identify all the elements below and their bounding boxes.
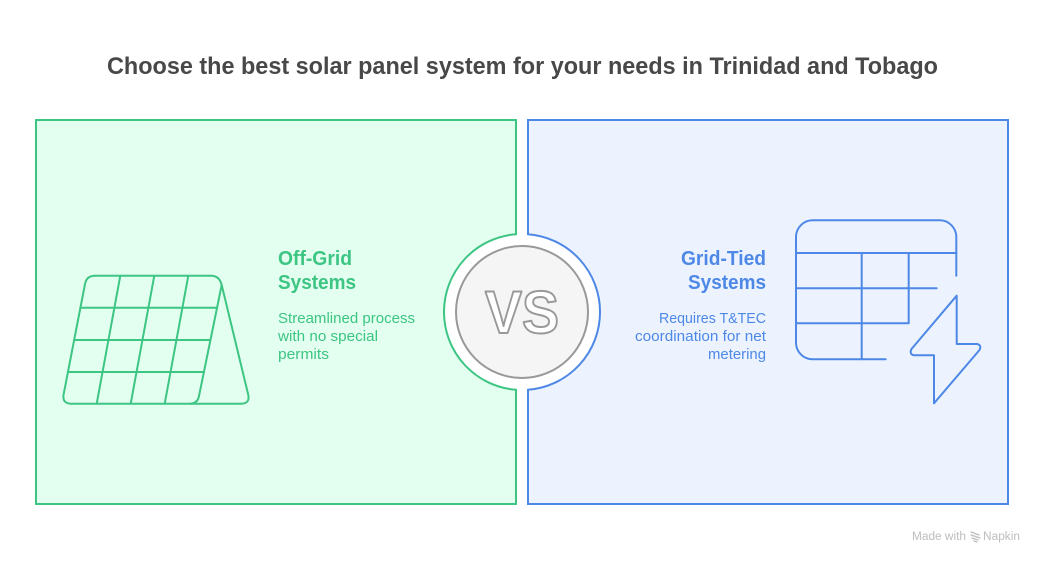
heading: grid-tied systems: Systems: [688, 272, 766, 294]
text: grid-tied description: Requires T&TEC: [659, 310, 766, 327]
heading: grid-tied systems: [681, 248, 766, 294]
text: off-grid description: with no special: [277, 328, 378, 345]
icon: grid with lightning bolt: [796, 220, 980, 403]
heading: off-grid systems: Systems: [278, 272, 356, 294]
title: Choose the best solar panel system for your needs in Trinidad and Tobago: [107, 53, 938, 80]
text: grid-tied description: metering: [708, 346, 766, 363]
panel background: [36, 120, 516, 504]
icon: solar panel: [63, 276, 249, 404]
vs badge: VS: [485, 279, 559, 346]
text: off-grid description: permits: [278, 346, 329, 363]
heading: grid-tied systems: Grid-Tied: [681, 248, 766, 270]
text: grid-tied description: [635, 310, 767, 363]
heading: off-grid systems: [278, 248, 356, 294]
panel: grid-tied systems: [528, 120, 1008, 504]
heading: off-grid systems: Off-Grid: [278, 248, 352, 270]
text: grid-tied description: coordination for net: [635, 328, 767, 345]
panel: off-grid systems: [36, 120, 516, 504]
text: off-grid description: Streamlined process: [278, 310, 415, 327]
icon: napkin logo: [971, 532, 980, 542]
footer: made with napkin: [912, 531, 1020, 543]
footer: made with napkin: Napkin: [983, 531, 1020, 543]
panel background: [528, 120, 1008, 504]
vs badge: [456, 246, 588, 378]
text: off-grid description: [277, 310, 415, 363]
footer: made with napkin: Made with: [912, 531, 966, 543]
